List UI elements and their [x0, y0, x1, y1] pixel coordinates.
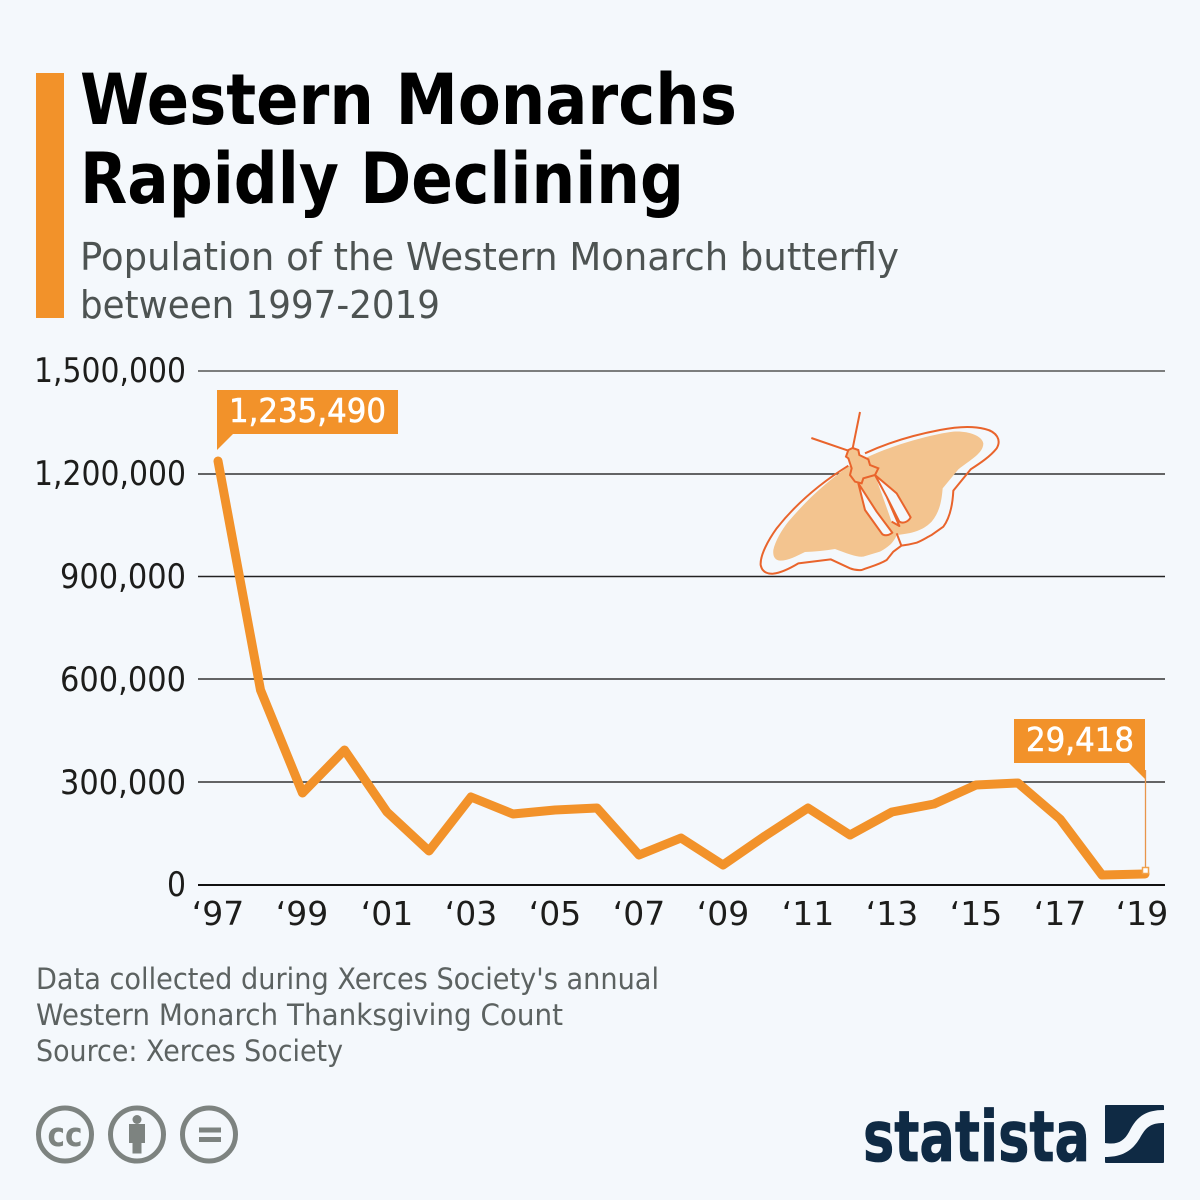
- icon: creative commons: cc: [48, 1115, 82, 1154]
- population line: [218, 461, 1145, 875]
- source note: Data collected during Xerces Society's annual: [36, 962, 659, 996]
- y axis labels: 0: [167, 865, 186, 905]
- source note: [36, 962, 659, 1068]
- logo mark: [1105, 1105, 1164, 1163]
- source note: Source: Xerces Society: [36, 1034, 343, 1068]
- leader line to last point: [1144, 770, 1146, 868]
- x axis labels: ‘15: [950, 894, 1002, 933]
- y axis labels: 1,500,000: [34, 351, 186, 391]
- subtitle: [80, 235, 899, 327]
- last point marker: [1142, 868, 1148, 874]
- subtitle: Population of the Western Monarch butterfly: [80, 235, 899, 279]
- x axis labels: ‘09: [697, 894, 749, 933]
- statista logo: [863, 1096, 1164, 1178]
- hindwing windows: [858, 475, 911, 535]
- callout: 2019 value: 29,418: [1026, 720, 1134, 759]
- antennae: [811, 412, 860, 451]
- source note: Western Monarch Thanksgiving Count: [36, 998, 563, 1032]
- y axis labels: [34, 351, 186, 905]
- x axis labels: ‘97: [192, 894, 244, 933]
- license icons: [38, 1108, 236, 1161]
- butterfly illustration: [761, 412, 999, 574]
- x axis labels: ‘11: [782, 894, 834, 933]
- y axis labels: 900,000: [60, 557, 186, 597]
- title: Western Monarchs: [80, 59, 737, 141]
- x axis labels: ‘99: [276, 894, 328, 933]
- subtitle: between 1997-2019: [80, 283, 440, 327]
- x axis labels: ‘17: [1034, 894, 1086, 933]
- title: Rapidly Declining: [80, 138, 684, 220]
- wing fill: [773, 432, 983, 561]
- y axis labels: 1,200,000: [34, 454, 186, 494]
- wing outline: [761, 427, 999, 574]
- icon: no derivatives: [182, 1108, 236, 1161]
- x axis labels: ‘13: [866, 894, 918, 933]
- x axis labels: ‘03: [445, 894, 497, 933]
- gridlines: [198, 371, 1165, 885]
- x axis labels: ‘01: [361, 894, 413, 933]
- body: [846, 448, 878, 483]
- y axis labels: 300,000: [60, 763, 186, 803]
- x axis labels: ‘05: [529, 894, 581, 933]
- callout: 1997 value: [217, 390, 398, 450]
- logo wordmark: statista: [863, 1096, 1090, 1178]
- y axis labels: 600,000: [60, 660, 186, 700]
- header accent bar: [36, 73, 64, 318]
- icon: attribution: [110, 1108, 164, 1161]
- x axis labels: ‘19: [1116, 894, 1168, 933]
- title: [80, 59, 737, 220]
- callout: 1997 value: 1,235,490: [229, 391, 386, 430]
- icon: creative commons: [38, 1108, 92, 1161]
- line chart: [34, 351, 1168, 933]
- x axis labels: [192, 894, 1168, 933]
- callout: 2019 value: [1014, 719, 1145, 779]
- x axis labels: ‘07: [613, 894, 665, 933]
